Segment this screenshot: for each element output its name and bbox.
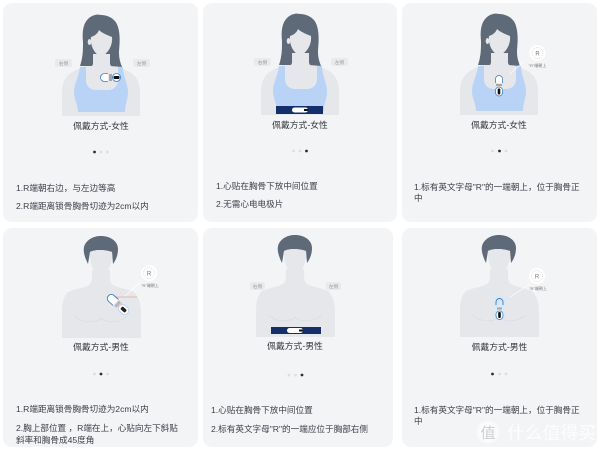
instructions: 1.R端距离锁骨胸骨切迹为2cm以内	[16, 403, 149, 414]
pagination dots	[93, 373, 109, 375]
instructions: 斜率和胸骨成45度角	[16, 434, 94, 445]
instructions	[414, 404, 580, 426]
panel: male diagonal placement	[3, 228, 198, 447]
caption: 佩戴方式-女性	[272, 119, 328, 130]
label: left side: 左侧	[137, 60, 146, 67]
label: right side: 右侧	[253, 283, 262, 290]
callout: R end up: R	[535, 274, 540, 280]
instructions	[211, 404, 368, 434]
panel: female side placement	[3, 3, 198, 222]
watermark: 什么值得买	[507, 423, 596, 443]
label: left side: 左侧	[335, 59, 344, 66]
instructions: 2.无需心电电极片	[216, 198, 283, 209]
panel: male strap placement	[203, 228, 393, 447]
illustration: male torso with vertical sensor	[460, 235, 539, 337]
caption: 佩戴方式-男性	[73, 341, 129, 352]
callout: R end up	[510, 268, 547, 297]
label: right side: 右侧	[258, 59, 267, 66]
pagination dots	[93, 151, 109, 153]
instructions: 1.心贴在胸骨下放中间位置	[216, 180, 318, 191]
caption: 佩戴方式-女性	[73, 120, 129, 131]
pagination dots	[288, 374, 303, 376]
pagination dots	[292, 150, 308, 152]
panel: female strap placement	[203, 3, 397, 222]
label: left side	[133, 59, 150, 67]
label: right side: 右侧	[59, 60, 68, 67]
illustration: male torso with diagonal sensor	[62, 236, 141, 338]
instructions	[16, 182, 149, 211]
callout: R end up: R	[147, 272, 152, 278]
caption: 佩戴方式-男性	[267, 340, 323, 351]
callout: R end up: "R"端朝上	[529, 62, 546, 68]
label: left side	[326, 282, 341, 290]
panel: female vertical placement	[402, 3, 597, 222]
label: left side: 左侧	[329, 283, 338, 290]
watermark	[477, 421, 596, 443]
instructions: 中	[414, 192, 423, 203]
instructions: 2.R端距离锁骨胸骨切迹为2cm以内	[16, 200, 149, 211]
callout: R end up	[510, 45, 546, 74]
callout: R end up	[125, 265, 159, 296]
panel: male vertical placement	[402, 228, 597, 447]
instructions: 1.标有英文字母"R"的一端朝上，位于胸骨正	[414, 404, 580, 415]
label: right side	[254, 58, 271, 66]
watermark: 值	[480, 425, 496, 442]
illustration: female torso with side sensor	[62, 15, 140, 116]
instructions: 1.标有英文字母"R"的一端朝上，位于胸骨正	[414, 181, 580, 192]
pagination dots	[491, 150, 507, 152]
label: right side	[250, 282, 265, 290]
instructions	[216, 180, 318, 209]
label: right side	[55, 59, 72, 67]
illustration: female torso with vertical sensor	[460, 14, 538, 115]
caption: 佩戴方式-女性	[471, 119, 527, 130]
instructions	[16, 403, 178, 445]
instructions: 1.心贴在胸骨下放中间位置	[211, 404, 313, 415]
label: left side	[331, 58, 348, 66]
instructions: 2.标有英文字母"R"的一端应位于胸部右侧	[211, 423, 368, 434]
instructions: 2.胸上部位置 ，R端在上，心贴向左下斜贴	[16, 422, 178, 433]
instructions: 1.R端朝右边，与左边等高	[16, 182, 116, 193]
illustration: female torso with chest strap	[261, 14, 339, 115]
instructions: 中	[414, 415, 423, 426]
callout: R end up: R	[535, 52, 540, 58]
instructions	[414, 181, 580, 203]
illustration: male torso with chest strap	[256, 235, 335, 337]
callout: R end up: "R"端朝上	[141, 282, 159, 288]
caption: 佩戴方式-男性	[472, 341, 528, 352]
callout: R end up: "R"端朝上	[529, 285, 547, 291]
pagination dots	[491, 373, 507, 375]
